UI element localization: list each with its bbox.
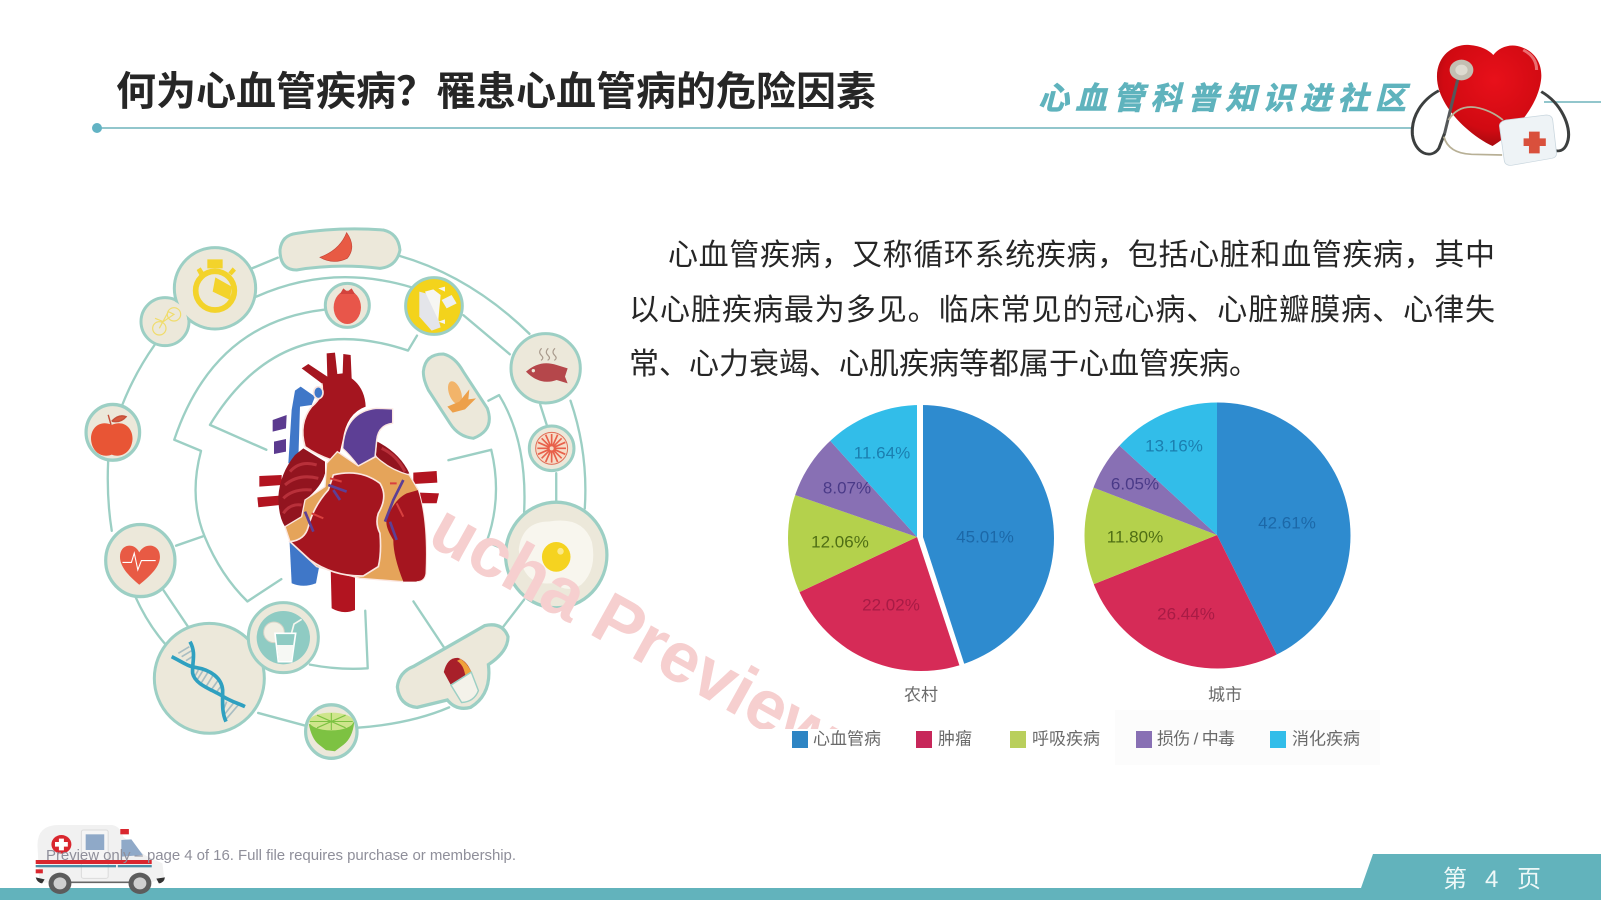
chart: urban pie: 26.44% <box>1157 604 1215 624</box>
node: stopwatch and bicycle <box>141 248 256 346</box>
footer bar <box>0 888 1601 900</box>
chart: urban pie: 6.05% <box>1111 474 1159 494</box>
chart: rural pie: 45.01% <box>956 528 1014 546</box>
node: watermelon <box>280 229 400 270</box>
icon: ambulance <box>36 825 165 894</box>
body paragraph: 以心脏疾病最为多见。临床常见的冠心病、心脏瓣膜病、心律失 <box>629 294 1495 327</box>
right atrium muscle <box>278 448 325 527</box>
page number tab <box>1361 854 1601 900</box>
ring connector lines <box>108 256 585 728</box>
title: 何为心血管疾病？罹患心血管病的危险因素 <box>116 70 876 114</box>
chart: rural pie: 8.07% <box>823 478 871 498</box>
node: DNA <box>154 623 264 733</box>
node: fish <box>511 334 580 403</box>
watermark: ucha Preview <box>417 488 853 777</box>
fat layer <box>285 452 418 582</box>
chart: rural pie: 农村 <box>904 686 938 704</box>
header rule with dot <box>92 102 1601 133</box>
chart legend: 呼吸疾病 <box>1032 730 1100 748</box>
node: apple <box>86 404 140 460</box>
node: drink <box>248 603 318 673</box>
node: citrus slice <box>529 426 574 471</box>
page number tab: 页 <box>1517 866 1541 893</box>
chart legend: 肿瘤 <box>938 730 972 748</box>
chart legend: 心血管病 <box>813 730 881 748</box>
pulmonary artery <box>343 408 393 466</box>
chart: urban pie: 13.16% <box>1145 436 1203 456</box>
chart legend: 消化疾病 <box>1292 730 1360 748</box>
chart: rural pie: 12.06% <box>811 532 869 552</box>
page number tab: 第 <box>1443 866 1467 893</box>
chart legend <box>792 710 1380 765</box>
node: capsule <box>397 625 508 708</box>
chart: rural pie <box>788 405 1054 702</box>
chart: urban pie <box>1084 402 1350 702</box>
body paragraph: 心血管疾病，又称循环系统疾病，包括心脏和血管疾病，其中 <box>668 239 1495 272</box>
rural pie slices <box>788 405 1054 671</box>
node: lime <box>306 705 357 758</box>
chart: rural pie: 22.02% <box>862 596 920 614</box>
chart: rural pie: 11.64% <box>854 444 910 462</box>
anatomical heart <box>257 353 439 612</box>
urban pie slices <box>1084 402 1350 668</box>
body paragraph: 常、心力衰竭、心肌疾病等都属于心血管疾病。 <box>629 348 1259 381</box>
right ventricle wall <box>386 490 426 582</box>
chart legend: 损伤 / 中毒 <box>1157 730 1235 748</box>
chart: urban pie: 42.61% <box>1258 514 1316 532</box>
risk factor ring diagram <box>86 229 607 758</box>
node: corn <box>423 354 489 438</box>
veins and stubs <box>257 387 439 612</box>
preview notice: Preview only – page 4 of 16. Full file requires purchase or membership. <box>46 847 516 864</box>
node: heart rate <box>106 524 175 597</box>
page number tab: 4 <box>1485 866 1498 893</box>
aorta <box>302 353 366 460</box>
coronary vessels <box>305 480 403 540</box>
back atrium <box>376 442 409 476</box>
slogan: 心血管科普知识进社区 <box>1038 81 1411 116</box>
node: sugar cubes <box>406 278 462 334</box>
chart: urban pie: 11.80% <box>1107 528 1163 546</box>
node: fried egg <box>506 502 607 608</box>
left ventricle <box>290 473 384 576</box>
node: raspberry <box>325 283 369 327</box>
body paragraph <box>629 239 1495 381</box>
icon: heart with stethoscope and first-aid kit <box>1412 45 1569 165</box>
chart: urban pie: 城市 <box>1208 686 1242 704</box>
